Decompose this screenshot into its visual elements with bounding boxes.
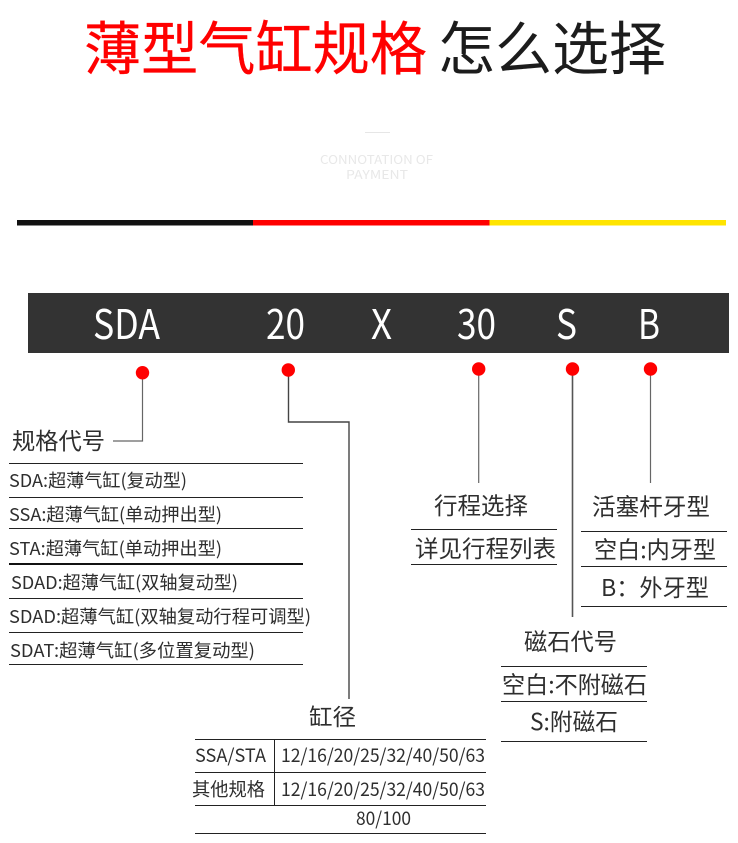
panel: bore table: 80/100 (356, 805, 411, 831)
panel: rod thread: 活塞杆牙型 (592, 488, 710, 522)
tricolor stripe (17, 220, 726, 226)
panel: bore table: SSA/STA (195, 742, 267, 768)
leader: SDA to spec code (113, 366, 149, 441)
panel: rod thread: B：外牙型 (601, 569, 709, 603)
panel: bore table: 12/16/20/25/32/40/50/63 (281, 776, 485, 802)
panel: stroke: 详见行程列表 (415, 530, 556, 564)
panel: spec code: SDAT:超薄气缸(多位置复动型) (10, 637, 255, 663)
model code bar: SDA (93, 291, 160, 351)
leader: 20 to bore (282, 363, 349, 699)
leader: B to rod thread (644, 362, 657, 483)
panel: bore table: 其他规格 (192, 776, 265, 802)
panel: bore table: 缸径 (309, 698, 356, 732)
faint caption: CONNOTATION OF (320, 151, 433, 168)
panel: rod thread: 空白:内牙型 (594, 531, 716, 565)
leader: 30 to stroke (472, 362, 485, 483)
panel: magnet: 磁石代号 (524, 623, 617, 657)
panel: stroke: 行程选择 (434, 487, 528, 521)
model code bar: 30 (457, 291, 496, 351)
faint caption: PAYMENT (346, 166, 408, 183)
panel: bore table: 12/16/20/25/32/40/50/63 (281, 742, 485, 768)
title (84, 2, 666, 86)
panel: spec code: SSA:超薄气缸(单动押出型) (9, 501, 222, 527)
panel: spec code: SDA:超薄气缸(复动型) (9, 467, 187, 493)
panel: bore table (192, 698, 486, 834)
model code bar: B (638, 291, 660, 351)
panel: spec code: SDAD:超薄气缸(双轴复动行程可调型) (9, 603, 311, 629)
model code bar: X (371, 291, 392, 351)
model code bar: S (556, 291, 577, 351)
panel: spec code (9, 422, 311, 664)
model code bar: 20 (266, 291, 305, 351)
panel: spec code: STA:超薄气缸(单动押出型) (9, 535, 222, 561)
panel: spec code: SDAD:超薄气缸(双轴复动型) (11, 569, 238, 595)
faint caption (320, 132, 433, 183)
title: 薄型气缸规格 (84, 2, 427, 86)
leader: S to magnet (566, 362, 579, 617)
panel: stroke (411, 487, 557, 564)
panel: magnet: S:附磁石 (530, 703, 618, 737)
model code bar (28, 291, 729, 353)
panel: magnet (501, 623, 647, 742)
panel: rod thread (581, 488, 727, 606)
title: 怎么选择 (438, 2, 666, 86)
panel: spec code: 规格代号 (12, 422, 105, 456)
panel: magnet: 空白:不附磁石 (502, 666, 647, 700)
